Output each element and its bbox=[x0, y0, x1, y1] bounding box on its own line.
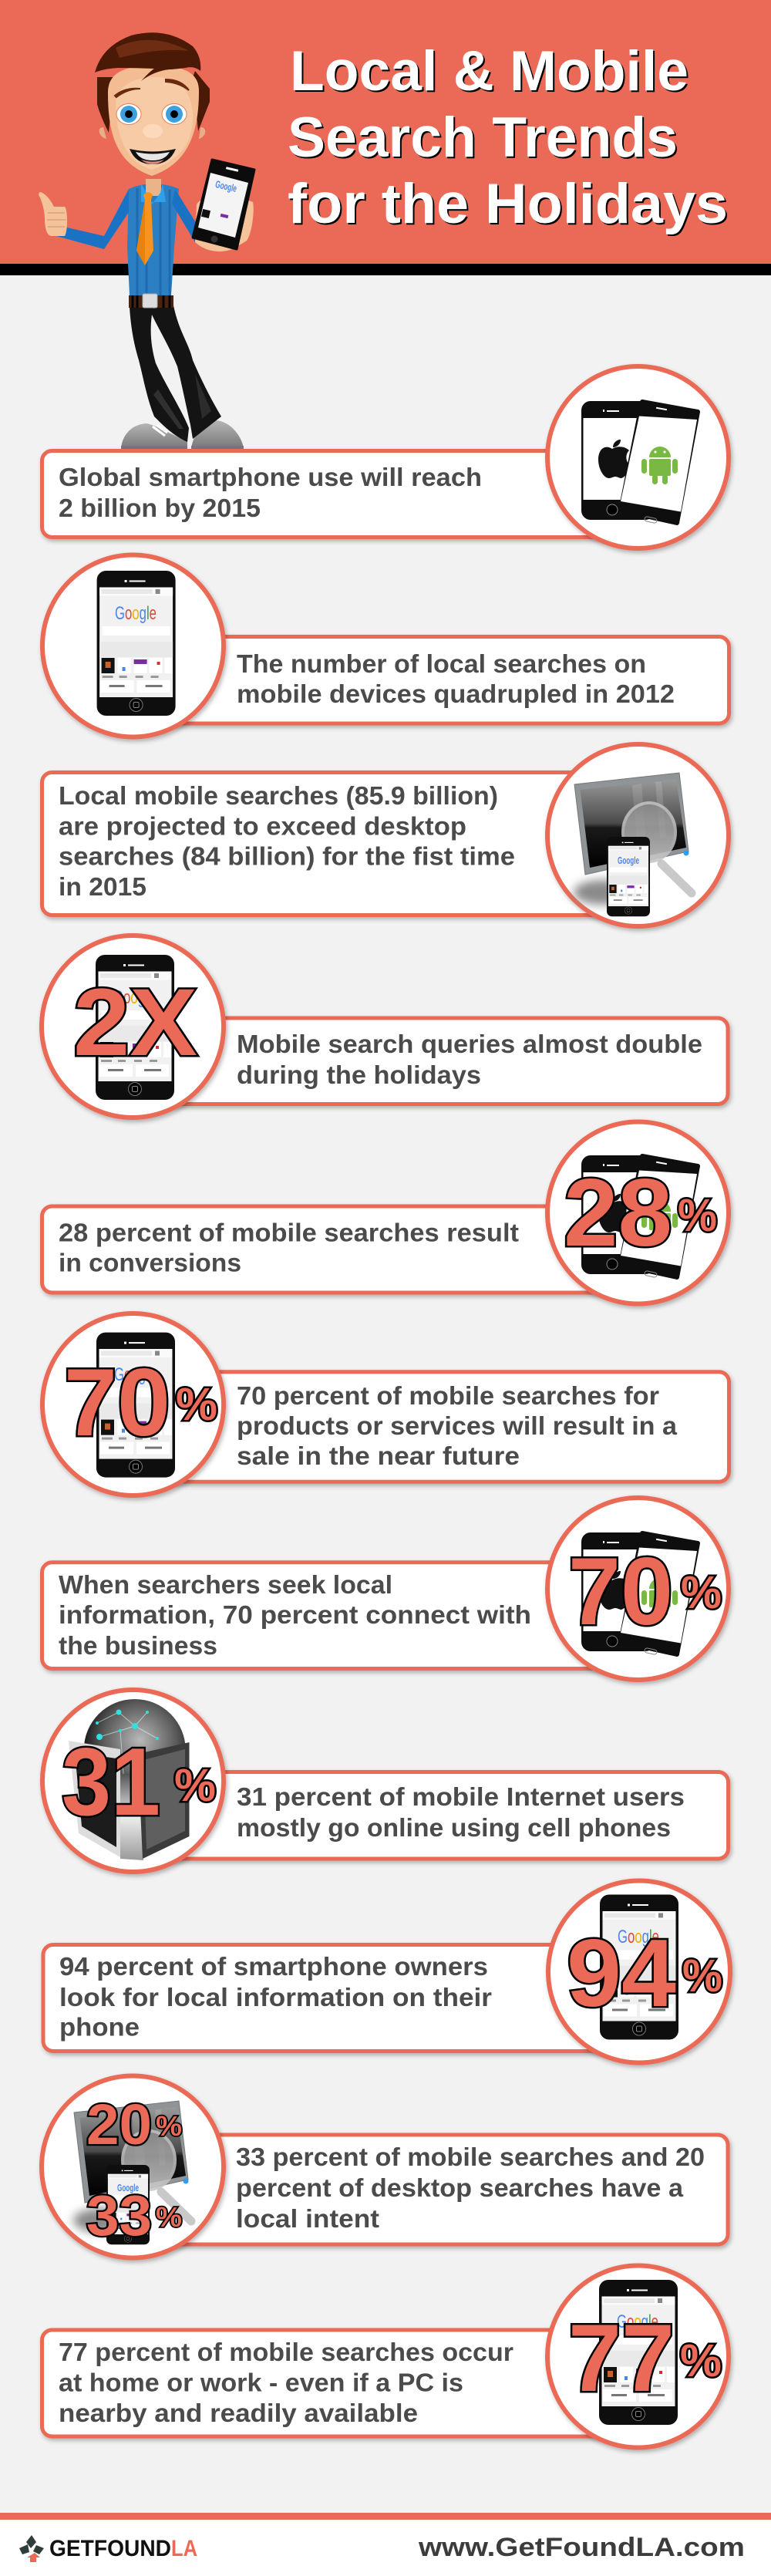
text: look for local information on their bbox=[59, 1983, 492, 2011]
card bbox=[116, 1772, 728, 1859]
panel: stat 5 28 percent bbox=[42, 1121, 729, 1303]
number: 77%: % bbox=[680, 2335, 722, 2386]
card bbox=[42, 2330, 651, 2436]
panel: stat 10 33 and 20 percent bbox=[42, 2076, 728, 2258]
number: 70%: % bbox=[681, 1567, 722, 1618]
number: 31%: 31 bbox=[62, 1729, 160, 1836]
logo wordmark: LA bbox=[171, 2536, 197, 2561]
icon: phone bbox=[96, 1333, 175, 1478]
card bbox=[42, 450, 651, 537]
number: 70%: % bbox=[176, 1379, 217, 1430]
number: 31% bbox=[62, 1729, 216, 1836]
circle badge bbox=[42, 2076, 224, 2258]
icon: phones bbox=[581, 1532, 698, 1655]
card bbox=[116, 1372, 729, 1482]
text: 70 percent of mobile searches for bbox=[237, 1381, 659, 1410]
card bbox=[42, 773, 651, 915]
panel: stat 11 77 percent bbox=[42, 2266, 729, 2448]
icon: monitor, magnifier and phone bbox=[73, 2101, 191, 2244]
card bbox=[42, 1563, 651, 1669]
icon: phone: Google bbox=[618, 1927, 659, 1947]
number: 94%: % bbox=[682, 1951, 722, 2001]
text: in 2015 bbox=[59, 872, 146, 901]
number: 28%: 28 bbox=[564, 1160, 672, 1266]
icon: phone bbox=[600, 1894, 678, 2039]
footer band bbox=[0, 2513, 771, 2576]
number: 77%: 77 bbox=[568, 2305, 675, 2412]
text: Global smartphone use will reach bbox=[59, 463, 482, 491]
text: 28 percent of mobile searches result bbox=[59, 1219, 519, 1246]
text: mobile devices quadrupled in 2012 bbox=[237, 679, 675, 708]
icon: monitor, magnifier and phone bbox=[574, 773, 692, 916]
number: 33%: % bbox=[156, 2201, 182, 2233]
number: 70% bbox=[568, 1539, 722, 1645]
circle badge bbox=[42, 1313, 224, 1495]
text: nearby and readily available bbox=[59, 2399, 418, 2427]
circle badge bbox=[548, 1880, 730, 2062]
text: mostly go online using cell phones bbox=[237, 1813, 671, 1842]
text: information, 70 percent connect with bbox=[59, 1600, 531, 1629]
card bbox=[43, 1945, 652, 2052]
icon: phone with Google bbox=[97, 571, 176, 716]
icon: monitor, magnifier and phone: Google bbox=[618, 855, 639, 866]
text: local intent bbox=[236, 2204, 379, 2233]
card bbox=[116, 1018, 728, 1104]
number: 94%: 94 bbox=[567, 1920, 676, 2027]
circle badge bbox=[547, 366, 729, 548]
number: 20% bbox=[86, 2092, 182, 2156]
number: 28% bbox=[564, 1160, 717, 1266]
number: 70%: 70 bbox=[568, 1539, 673, 1645]
illustration: cartoon man holding a phone: Google bbox=[214, 178, 238, 194]
number: 77% bbox=[568, 2305, 722, 2412]
panel: stat 1 global smartphone use bbox=[42, 366, 729, 548]
title bbox=[288, 40, 728, 235]
text: in conversions bbox=[59, 1248, 241, 1277]
text: percent of desktop searches have a bbox=[236, 2173, 684, 2202]
icon: phone: Google bbox=[113, 987, 155, 1008]
icon: phone bbox=[96, 955, 174, 1100]
number: 94% bbox=[567, 1920, 722, 2027]
logo wordmark: GETFOUND bbox=[49, 2536, 171, 2561]
circle badge bbox=[42, 555, 224, 737]
card bbox=[42, 1206, 651, 1293]
panel: stat 3 mobile exceeds desktop bbox=[42, 744, 729, 926]
text: 33 percent of mobile searches and 20 bbox=[236, 2143, 705, 2171]
text: 77 percent of mobile searches occur bbox=[59, 2338, 513, 2366]
icon: phone with Google: Google bbox=[115, 603, 157, 624]
circle badge bbox=[547, 744, 729, 926]
number: 33% bbox=[86, 2183, 182, 2247]
text: the business bbox=[59, 1631, 217, 1660]
icon: phone: Google bbox=[114, 1364, 156, 1385]
icon: monitor, magnifier and phone: Google bbox=[117, 2182, 139, 2193]
number: 33%: 33 bbox=[86, 2183, 152, 2247]
text: during the holidays bbox=[237, 1060, 481, 1089]
text: searches (84 billion) for the fist time bbox=[59, 842, 515, 870]
header band bbox=[0, 0, 771, 275]
number: 2X: 2X bbox=[73, 969, 197, 1076]
icon: globe and phones bbox=[69, 1699, 190, 1860]
text: When searchers seek local bbox=[59, 1570, 392, 1599]
number: 70% bbox=[64, 1350, 217, 1456]
text: Local mobile searches (85.9 billion) bbox=[59, 781, 498, 810]
number: 20%: % bbox=[156, 2110, 182, 2142]
title: Local & Mobile bbox=[290, 40, 689, 103]
icon: phones bbox=[581, 1155, 698, 1278]
icon: GetFoundLA logo mark bbox=[19, 2535, 44, 2562]
circle badge bbox=[547, 1121, 729, 1303]
icon: iPhone and Android phones bbox=[581, 401, 698, 524]
number: 28%: % bbox=[678, 1190, 717, 1241]
website url: www.GetFoundLA.com bbox=[418, 2533, 745, 2562]
panel: stat 7 70 percent connect bbox=[42, 1498, 729, 1680]
panel: stat 8 31 percent bbox=[42, 1690, 728, 1872]
text: Mobile search queries almost double bbox=[237, 1030, 702, 1058]
panel: stat 2 local searches quadrupled bbox=[42, 555, 729, 737]
title: Search Trends bbox=[288, 106, 678, 169]
card bbox=[116, 637, 729, 723]
circle badge bbox=[42, 1690, 224, 1872]
text: 31 percent of mobile Internet users bbox=[237, 1782, 685, 1811]
title: for the Holidays bbox=[288, 173, 728, 235]
number: 31%: % bbox=[174, 1760, 216, 1811]
card bbox=[116, 2135, 728, 2244]
text: phone bbox=[59, 2013, 140, 2041]
text: products or services will result in a bbox=[237, 1411, 678, 1440]
text: at home or work - even if a PC is bbox=[59, 2368, 463, 2397]
text: 94 percent of smartphone owners bbox=[59, 1952, 488, 1981]
text: 2 billion by 2015 bbox=[59, 494, 261, 522]
circle badge bbox=[42, 936, 224, 1118]
panel: stat 6 70 percent sale bbox=[42, 1313, 729, 1495]
illustration: cartoon man holding a phone bbox=[39, 32, 254, 449]
panel: stat 9 94 percent bbox=[43, 1880, 730, 2062]
panel: stat 4 queries double bbox=[42, 936, 728, 1118]
icon: phone bbox=[599, 2280, 678, 2425]
text: are projected to exceed desktop bbox=[59, 811, 466, 841]
icon: phone: Google bbox=[617, 2311, 658, 2332]
text: sale in the near future bbox=[237, 1441, 520, 1470]
text: The number of local searches on bbox=[237, 649, 646, 678]
circle badge bbox=[547, 1498, 729, 1680]
number: 20%: 20 bbox=[86, 2092, 152, 2156]
number: 70%: 70 bbox=[64, 1350, 170, 1456]
circle badge bbox=[547, 2266, 729, 2448]
